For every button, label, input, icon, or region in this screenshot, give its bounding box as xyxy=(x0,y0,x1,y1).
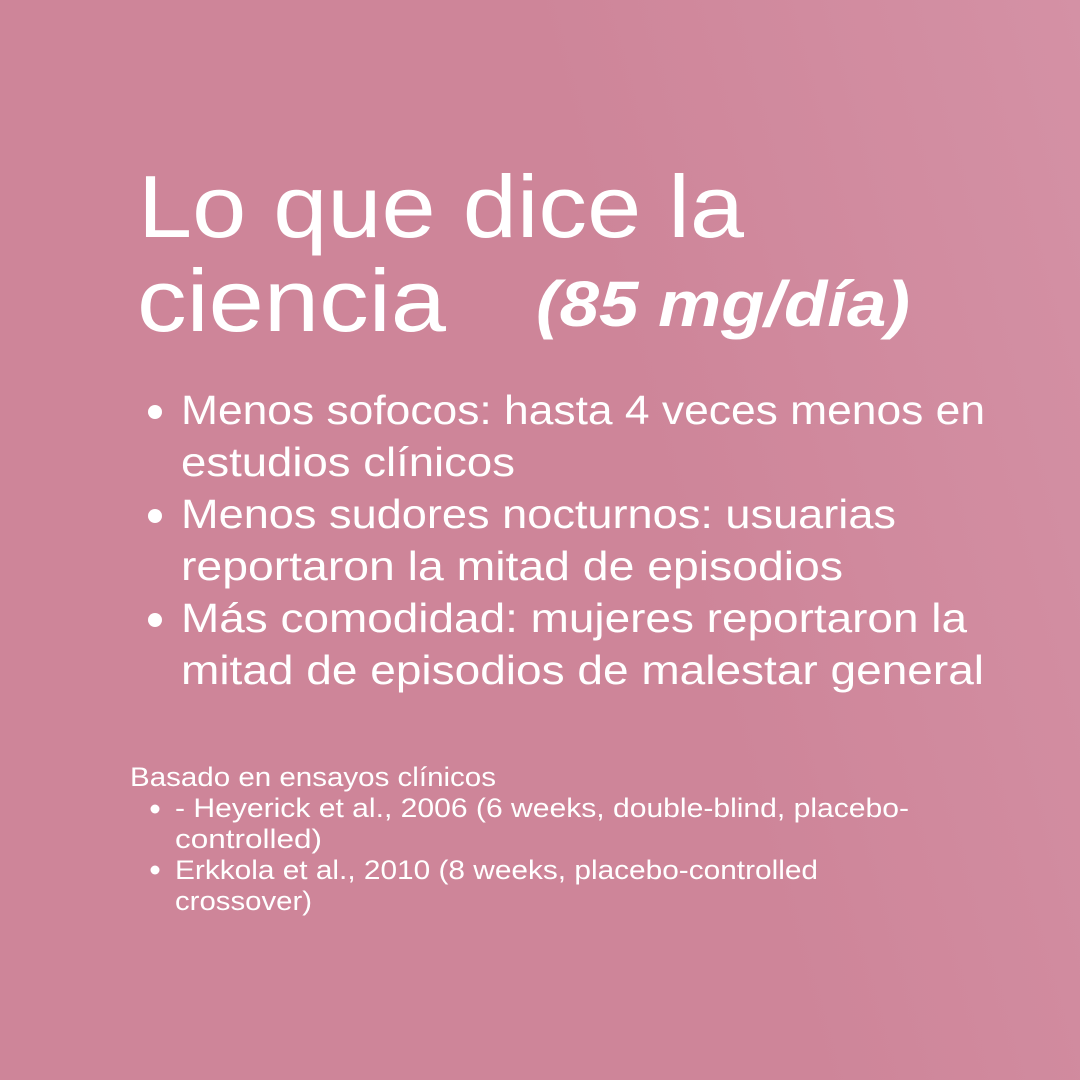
reference 1 xyxy=(175,793,909,854)
title line 1: Lo que dice la xyxy=(138,157,744,256)
reference 2: Erkkola et al., 2010 (8 weeks, placebo-controlled xyxy=(175,855,818,885)
reference 2: crossover) xyxy=(175,886,312,916)
title xyxy=(137,157,910,350)
reference 2 xyxy=(175,855,818,916)
reference 1: - Heyerick et al., 2006 (6 weeks, double-blind, placebo- xyxy=(175,793,909,823)
bullet: sofocos xyxy=(148,405,162,419)
benefit 3 xyxy=(181,595,984,693)
benefit 2: reportaron la mitad de episodios xyxy=(181,543,843,589)
title line 2: ciencia xyxy=(137,251,446,350)
benefit 2: Menos sudores nocturnos: usuarias xyxy=(181,491,896,537)
bullet: comodidad xyxy=(148,613,162,627)
reference 1: controlled) xyxy=(175,824,322,854)
benefit 1: Menos sofocos: hasta 4 veces menos en xyxy=(181,387,985,433)
benefit 3: Más comodidad: mujeres reportaron la xyxy=(181,595,967,641)
bullet: Heyerick xyxy=(150,804,160,814)
bullet: Erkkola xyxy=(150,866,160,874)
benefit 1 xyxy=(181,387,985,485)
references intro: Basado en ensayos clínicos xyxy=(130,762,496,792)
benefit 2 xyxy=(181,491,896,589)
bullet: sudores xyxy=(148,509,162,523)
dose note: (85 mg/día) xyxy=(536,268,910,340)
benefit 1: estudios clínicos xyxy=(181,439,515,485)
references xyxy=(130,762,909,916)
benefit 3: mitad de episodios de malestar general xyxy=(181,647,984,693)
benefits list xyxy=(148,387,985,693)
